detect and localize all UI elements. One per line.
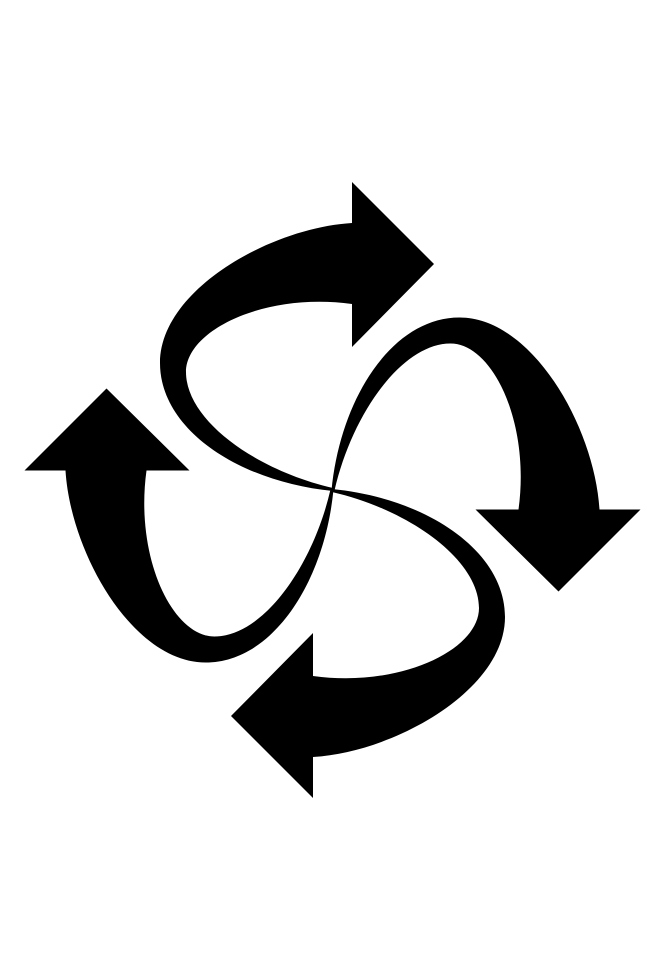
arrow: left, pointing up: [24, 388, 334, 662]
arrow: right, pointing down: [332, 318, 640, 592]
arrow: bottom, pointing left: [231, 489, 505, 798]
arrow: top, pointing right: [160, 182, 434, 491]
